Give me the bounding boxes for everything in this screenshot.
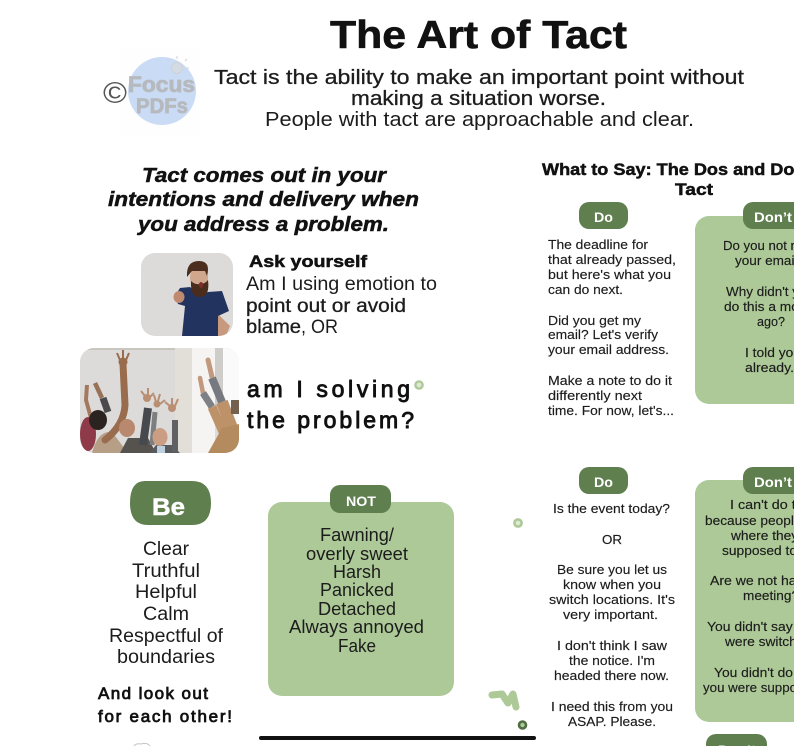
Do text 2 (549, 501, 675, 729)
decorative dot: light green small (514, 519, 522, 527)
logo: Focus PDFs watermark (103, 48, 199, 136)
Do pill 1 (579, 202, 628, 229)
Don't pill 3 (cut off at bottom edge) (706, 734, 767, 746)
Do text 2: ASAP. Please. (568, 714, 656, 729)
handwritten: and look out for each other: And look out (98, 684, 208, 703)
Do text 1 (548, 237, 676, 418)
decorative squiggle (492, 694, 516, 707)
handwritten: am I solving the problem?: the problem? (247, 407, 414, 433)
ask yourself text: point out or avoid (246, 296, 406, 317)
logo: Focus PDFs watermark: PDFs (136, 95, 188, 118)
title: The Art of Tact (330, 14, 627, 57)
heading: what to say: Tact (675, 180, 713, 199)
intro text: People with tact are approachable and clear. (265, 108, 694, 131)
ask yourself text: blame (246, 317, 301, 338)
Do text 1: email? Let's verify (548, 327, 658, 342)
Do text 2: I need this from you (551, 699, 673, 714)
panel: NOT (268, 485, 454, 696)
bottom black bar (259, 736, 536, 740)
Do text 2: Be sure you let us (557, 562, 667, 577)
Be list (109, 539, 224, 668)
Do pill 2 (579, 467, 628, 494)
handwritten: and look out for each other (98, 684, 232, 726)
Do text 1: that already passed, (548, 252, 676, 267)
Do text 2: I don't think I saw (557, 638, 668, 653)
panel: NOT: Always annoyed (289, 616, 424, 637)
Do text 1: differently next (548, 388, 642, 403)
Do text 1: Did you get my (548, 313, 641, 328)
Do text 2: switch locations. It's (549, 592, 675, 607)
Be list: Calm (143, 604, 189, 625)
Do pill 1: Do (594, 209, 613, 225)
panel: Don't 1: Don’t (754, 209, 792, 225)
Do pill 2: Do (594, 474, 613, 490)
Be list: boundaries (117, 647, 215, 668)
Do text 2: headed there now. (554, 668, 669, 683)
Do text 2: know when you (563, 577, 661, 592)
ask yourself text: , OR (301, 317, 338, 338)
panel: NOT: Harsh (333, 561, 381, 582)
handwritten: am I solving the problem? (247, 376, 414, 433)
Be list: Truthful (132, 561, 200, 582)
panel: NOT: NOT (346, 493, 376, 509)
photo: people raising hands (80, 348, 239, 453)
Do text 2: OR (602, 532, 622, 547)
ask yourself text: Ask yourself (249, 252, 367, 271)
panel: Don't 1: ago? (757, 314, 785, 329)
heading: intentions and delivery: Tact comes out in your (142, 165, 387, 187)
heading: what to say (542, 160, 794, 199)
Do text 1: your email address. (548, 342, 669, 357)
heading: intentions and delivery: you address a problem. (137, 214, 389, 236)
Do text 2: Is the event today? (553, 501, 670, 516)
intro text: making a situation worse. (351, 87, 606, 110)
panel: NOT: Fake (338, 635, 376, 656)
decorative dot: light green (415, 381, 423, 389)
panel: NOT: Fawning/ (320, 524, 395, 545)
Do text 1: Make a note to do it (548, 373, 672, 388)
logo: Focus PDFs watermark: © (103, 77, 127, 110)
Be list: Clear (143, 539, 190, 560)
intro text: Tact is the ability to make an important point without (214, 66, 744, 89)
Be pill (130, 481, 211, 525)
heading: intentions and delivery: intentions and delivery when (108, 189, 419, 211)
Do text 1: time. For now, let's... (548, 403, 674, 418)
heading: intentions and delivery (108, 165, 419, 236)
panel: Don't 1: already. (745, 360, 794, 375)
Be list: Helpful (135, 582, 197, 603)
logo: Focus PDFs watermark: Focus (128, 72, 195, 97)
Do text 1: can do next. (548, 282, 623, 297)
decorative dot: dark green (519, 722, 526, 728)
panel: Don't 1 (695, 202, 794, 404)
panel: NOT: overly sweet (306, 543, 408, 564)
panel: NOT: Detached (318, 598, 396, 619)
handwritten: and look out for each other: for each other! (98, 707, 232, 726)
panel: Don't 2 (695, 467, 794, 722)
intro text (214, 66, 744, 131)
Do text 1: The deadline for (548, 237, 649, 252)
photo: man pointing (141, 253, 233, 336)
Be pill: Be (152, 494, 185, 521)
Do text 2: the notice. I'm (569, 653, 655, 668)
handwritten: am I solving the problem?: am I solving (247, 376, 410, 402)
ask yourself text: Am I using emotion to (246, 274, 437, 295)
Do text 2: very important. (563, 607, 658, 622)
Be list: Respectful of (109, 626, 224, 647)
ask yourself text (246, 252, 437, 338)
panel: NOT: Panicked (320, 579, 394, 600)
Do text 1: but here's what you (548, 267, 671, 282)
small icon fragment at bottom edge (134, 743, 150, 746)
panel: Don't 2: Don’t (754, 474, 792, 490)
